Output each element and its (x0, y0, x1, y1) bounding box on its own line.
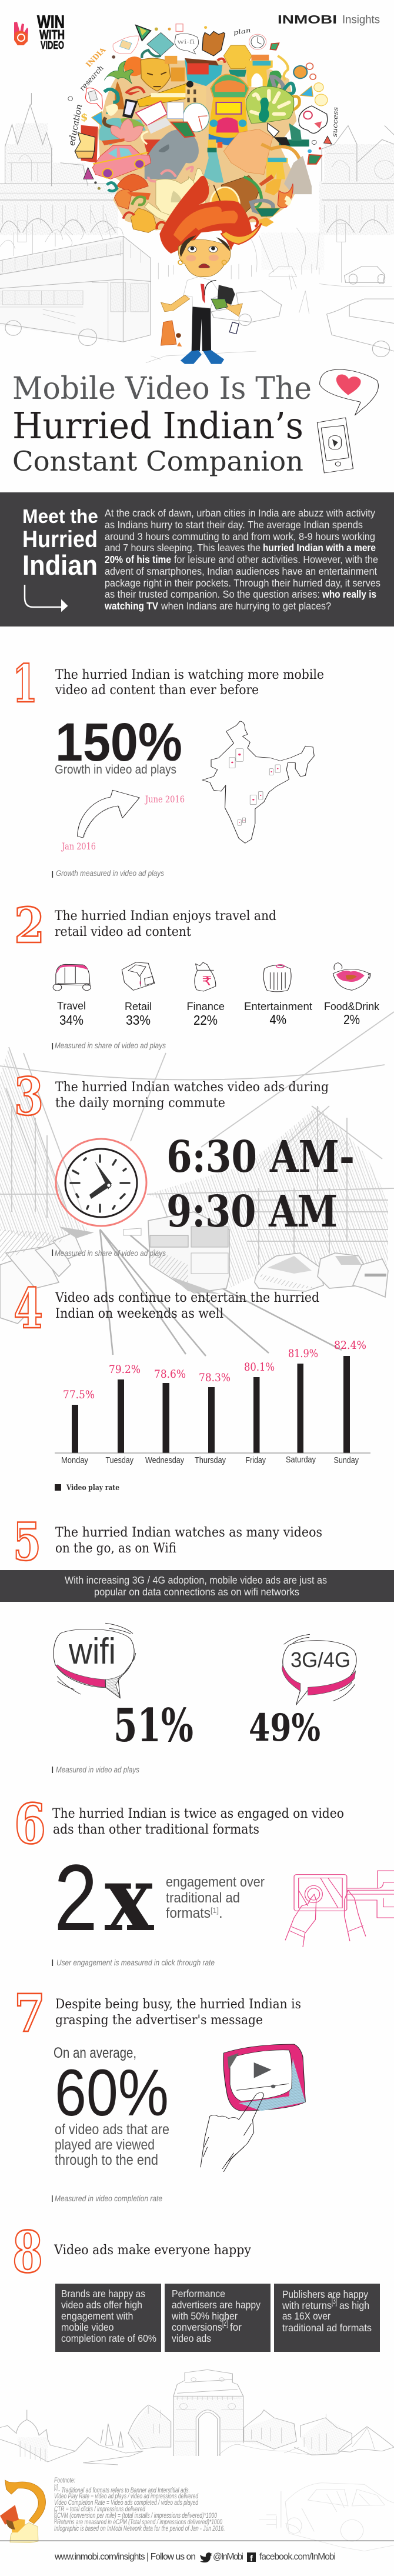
section 7 heading: Despite being busy, the hurried Indian is (55, 1997, 301, 2012)
doodle: village lady (203, 139, 223, 182)
doodle: book left (75, 125, 98, 163)
panel body text: around 3 hours commuting to and from work, 8-9 hours working (105, 531, 375, 542)
footnote text (54, 2477, 225, 2532)
panel body text: hurried Indian with a mere (263, 542, 376, 554)
sketch: double-decker bus (0, 236, 151, 346)
doodle: checkered auto rickshaw, lion capital and horn (223, 124, 312, 195)
day labels: Monday (61, 1455, 88, 1465)
footnote: measured in video ad plays: Measured in video ad plays (56, 1765, 139, 1774)
panel: meet the hurried Indian (0, 492, 394, 626)
panel body text: when Indians are hurrying to get places? (161, 600, 331, 612)
stat: morning commute time: 9:30 AM (166, 1187, 338, 1237)
footnote text: CVM (conversion per mile) = (total installs / impressions delivered)*1000 (57, 2512, 217, 2520)
card: performance advertisers: advertisers are happy (172, 2299, 261, 2311)
card: brands: video ads offer high (61, 2299, 142, 2311)
icon: facebook (247, 2552, 256, 2564)
stat: 60 percent completion: On an average, (54, 2045, 136, 2061)
doodle: outlined icons around cloud: INDIA (84, 45, 108, 69)
card: publishers: Publishers are happy (282, 2288, 368, 2300)
category: Food and Drink: Food&Drink (324, 1001, 380, 1012)
panel body text: who really is (322, 588, 376, 600)
icon: clock (56, 1139, 146, 1226)
stat description: . (219, 1905, 223, 1921)
section 5 heading: The hurried Indian watches as many videos (55, 1525, 322, 1540)
icon: peace hand (14, 22, 28, 45)
banner: 3G 4G adoption (0, 1570, 394, 1602)
stat: 2x engagement (54, 1845, 155, 1952)
section 2 heading (55, 909, 276, 939)
section 3 heading: The hurried Indian watches video ads during (55, 1080, 329, 1095)
panel heading: Hurried (22, 526, 98, 552)
section 3 heading (55, 1080, 329, 1111)
doodle: warm backing tone of cloud (98, 61, 299, 230)
stat description: formats (166, 1905, 211, 1921)
card: performance advertisers: with 50% higher (171, 2310, 238, 2322)
card: publishers (274, 2284, 380, 2352)
doodle: palm tree (104, 56, 145, 109)
section 4 heading (55, 1291, 319, 1321)
left parked cars (0, 1227, 141, 1324)
logo: InMobi Insights: Insights (342, 14, 380, 26)
panel body text: and 7 hours sleeping. This leaves the (105, 542, 261, 554)
section 7 number: 7 (14, 1982, 45, 2044)
map: India with phones (202, 721, 314, 843)
card: publishers: [3] (332, 2295, 337, 2307)
left monuments (0, 2405, 171, 2465)
stat description: traditional ad (166, 1890, 240, 1906)
doodle: folded orange turban (107, 174, 151, 209)
icon: wifi speech bubble (54, 1623, 136, 1698)
day labels: Friday (246, 1455, 266, 1465)
character: the hurried Indian (161, 235, 242, 364)
section 1 heading: The hurried Indian is watching more mobile (55, 668, 324, 682)
India Gate (173, 2370, 243, 2456)
card: brands (55, 2284, 161, 2352)
character: bags, phone and shopping (161, 280, 239, 346)
category: Travel: 34% (59, 1012, 84, 1028)
title: Mobile Video Is The (12, 371, 312, 406)
card: performance advertisers: conversions (172, 2321, 222, 2333)
stat: 60 percent completion: played are viewed (55, 2137, 155, 2153)
doodle: outlined icons around cloud: education (67, 104, 85, 146)
bar values: 82.4% (334, 1339, 366, 1352)
stat: 150% growth: Growth in video ad plays (55, 763, 176, 777)
character: shirt, arms and tie (161, 277, 242, 316)
stat: 2x engagement: 2 (54, 1845, 98, 1950)
tram (148, 1212, 229, 1294)
doodle: fist, lamp and swirls near turban (123, 184, 293, 232)
character: head and face (178, 235, 231, 277)
chart legend (55, 1484, 119, 1492)
footer links: @InMobi (213, 2552, 243, 2562)
logo: InMobi Insights (278, 14, 380, 26)
card: publishers: as high (339, 2300, 369, 2311)
category: Entertainment: 4% (269, 1012, 286, 1027)
bar chart: video play rate by day (55, 1339, 370, 1465)
icon: hands on tablet (285, 1871, 394, 1947)
section 5 heading: on the go, as on Wifi (55, 1541, 176, 1556)
section 6 heading: The hurried Indian is twice as engaged on video (52, 1807, 344, 1821)
bars (72, 1356, 350, 1453)
card: brands: completion rate of 60% (61, 2332, 156, 2344)
footnote text: [2] (54, 2510, 57, 2517)
bar values (63, 1339, 366, 1401)
panel body text: watching TV (104, 600, 158, 612)
category: Finance: ₹ (202, 974, 212, 988)
stat description: engagement over (166, 1874, 265, 1890)
section 1 heading (55, 668, 324, 698)
section 1 heading: video ad content than ever before (55, 683, 259, 698)
day labels: Saturday (286, 1455, 316, 1465)
stat: 60 percent completion: through to the end (55, 2152, 158, 2168)
icon: finger tapping video player (201, 2044, 305, 2172)
section 5 heading (55, 1525, 322, 1556)
sketch: ambassador taxis and pedestrians (146, 263, 394, 363)
title (12, 371, 312, 477)
card: performance advertisers: [2] (222, 2317, 228, 2328)
card: publishers: traditional ad formats (282, 2322, 372, 2334)
footnote: measured in share: Measured in share of video ad plays (55, 1248, 166, 1258)
card: publishers: with returns (282, 2300, 332, 2311)
hero background: pencil sketch of city street (0, 24, 394, 364)
doodle: lantern (218, 45, 252, 76)
doodle: swirls upper right (272, 56, 307, 110)
logo: InMobi Insights: INMOBI (278, 14, 337, 26)
banner: 3G 4G adoption: popular on data connections as on wifi networks (94, 1586, 299, 1598)
panel body text: for leisure and other activities. However, with the (174, 554, 378, 565)
section 2 number: 2 (14, 898, 45, 954)
panel heading (22, 505, 98, 581)
doodle: outlined icons around cloud: $ (81, 112, 88, 124)
category: Finance: Finance (187, 1001, 225, 1012)
card: performance advertisers: video ads (172, 2332, 211, 2344)
section 4 heading: Indian on weekends as well (55, 1307, 223, 1321)
doodle: outlined icons around cloud: wi-fi (177, 38, 195, 45)
panel body text: advent of smartphones, Indian audiences have an entertainment (105, 565, 377, 577)
card: performance advertisers: for (230, 2321, 242, 2333)
card: performance advertisers (165, 2284, 271, 2352)
character: legs and shoes (181, 306, 224, 364)
sketch: right station building (251, 126, 394, 282)
bar values: 78.3% (199, 1371, 231, 1384)
card: brands: engagement with (61, 2310, 133, 2322)
day labels: Thursday (195, 1455, 226, 1465)
panel body text: package right in their pockets. Through their hurried day, it serves (105, 577, 380, 589)
icon: heart speech bubble (320, 369, 378, 415)
footnote: click through rate: User engagement is measured in click through rate (56, 1958, 215, 1967)
arrow: growth arrow (78, 790, 139, 838)
footer rule (0, 2540, 394, 2541)
day labels: Wednesday (145, 1455, 184, 1465)
label: Jan 2016: Jan 2016 (61, 841, 96, 852)
category: Food and Drink (324, 963, 380, 1027)
doodle: auto rickshaw top (165, 56, 222, 88)
panel heading: Meet the (22, 505, 98, 527)
footnote text: [1] (54, 2484, 58, 2491)
footnote text: Infographic is based on InMobi Network data for the period of Jan - Jun 2016. (54, 2525, 225, 2532)
category: Retail: 33% (126, 1012, 151, 1028)
doodle: dhol drum (211, 176, 261, 222)
doodle: speedometer clock and phones (122, 87, 209, 134)
category: Finance (187, 962, 225, 1028)
stat: 51 percent wifi: 51% (113, 1699, 193, 1752)
arrow: white bent arrow (25, 585, 67, 611)
illustration: Delhi skyline sketch (0, 2370, 394, 2465)
footnote text: Video Play Rate = video ad plays / video ad impressions delivered (54, 2493, 198, 2500)
section 2 heading: retail video ad content (55, 925, 191, 939)
category: Finance: 22% (193, 1012, 218, 1028)
footnote: video completion rate: Measured in video completion rate (55, 2194, 162, 2203)
stat: 60 percent completion: 60% (55, 2056, 169, 2130)
illustration: horn blower (0, 2480, 45, 2543)
section 3 number: 3 (14, 1066, 44, 1127)
panel heading: Indian (22, 549, 98, 581)
label: June 2016: June 2016 (144, 794, 185, 805)
doodle: outlined icons around cloud: plan (233, 26, 252, 36)
logo: Win With Video (14, 12, 65, 51)
banner: 3G 4G adoption: With increasing 3G / 4G adoption, mobile video ads are just as (65, 1574, 327, 1586)
title: Constant Companion (12, 445, 303, 477)
day labels: Sunday (334, 1455, 359, 1465)
logo text: VIDEO (41, 39, 64, 51)
footnote text: Footnote: (54, 2477, 75, 2484)
bar values: 80.1% (244, 1361, 275, 1374)
section 1 number: 1 (12, 653, 38, 714)
section 2 heading: The hurried Indian enjoys travel and (55, 909, 276, 924)
footnote: growth measured: Growth measured in video ad plays (56, 868, 164, 878)
logo text: WIN (37, 12, 65, 32)
doodle: peacock (246, 86, 294, 124)
doodle: painted truck (209, 75, 249, 148)
section 7 heading (55, 1997, 301, 2028)
footnote text: Video Completion Rate = Video ads completed / video ads played (54, 2500, 198, 2507)
category: Food and Drink: 2% (343, 1012, 360, 1027)
bar values: 79.2% (109, 1363, 141, 1376)
stat: 60 percent completion (54, 2045, 169, 2168)
logo text (37, 12, 65, 51)
section 8 heading: Video ads make everyone happy (54, 2243, 252, 2258)
right monuments (219, 2410, 394, 2455)
section 6 number: 6 (14, 1792, 46, 1857)
day labels: Tuesday (106, 1455, 133, 1465)
footnote text: CTR = total clicks / impressions delivered (54, 2506, 145, 2513)
doodle: outlined icons around cloud: success (330, 106, 340, 137)
category: Travel (53, 964, 91, 1028)
doodle: outlined icons around cloud (67, 24, 340, 190)
day labels (61, 1455, 359, 1465)
icon: 3G 4G speech bubble: 3G/4G (291, 1648, 350, 1672)
footnote text: Returns are measured in eCPM (Total spend / impressions delivered)*1000 (57, 2519, 222, 2526)
card: brands: Brands are happy as (61, 2288, 145, 2300)
footnote text: - Traditional ad formats refers to Banner and Interstitial ads. (58, 2487, 190, 2494)
card: publishers: as 16X over (282, 2310, 330, 2322)
logo text: WITH (39, 27, 65, 42)
doodle: lotus (111, 119, 143, 142)
icon: 3G 4G speech bubble (282, 1634, 356, 1705)
sketch: left station building (0, 93, 123, 256)
category: Retail: Retail (125, 1001, 152, 1012)
section 4 heading: Video ads continue to entertain the hurried (55, 1291, 319, 1305)
doodle: yellow bus (126, 84, 206, 109)
section 8 number: 8 (12, 2219, 43, 2285)
footnote text: [3] (54, 2517, 57, 2524)
stat: 49 percent 3G 4G: 49% (249, 1706, 320, 1750)
stat description: [1] (211, 1906, 219, 1915)
section 5 number: 5 (13, 1511, 41, 1572)
doodle: elephant (142, 122, 199, 179)
card: performance advertisers: Performance (172, 2288, 225, 2300)
card: brands: mobile video (61, 2321, 114, 2333)
panel body text: as Indians hurry to start their day. The average Indian spends (105, 519, 363, 531)
stat: 60 percent completion: of video ads that are (55, 2121, 169, 2138)
bar values: 77.5% (63, 1388, 95, 1401)
footer links (54, 2552, 336, 2564)
background: commuter street sketch with tram and cars (0, 1012, 394, 1356)
bar values: 78.6% (154, 1368, 186, 1381)
section 7 heading: grasping the advertiser's message (55, 2013, 263, 2028)
footnote: measured in share: Measured in share of video ad plays (55, 1041, 166, 1050)
doodle: lion (141, 58, 171, 91)
stat: 2x engagement: x (105, 1846, 155, 1952)
doodle: teal swirl left (99, 89, 146, 145)
category: Retail (122, 962, 155, 1028)
stat: morning commute time: 6:30 AM- (166, 1132, 355, 1182)
section 6 heading (52, 1807, 344, 1837)
panel body text: At the crack of dawn, urban cities in India are abuzz with activity (105, 507, 375, 519)
doodle: pink car (92, 138, 151, 179)
bar values: 81.9% (288, 1347, 318, 1360)
section 6 heading: ads than other traditional formats (53, 1822, 259, 1837)
footer links: facebook.com/InMobi (259, 2552, 336, 2562)
category: Entertainment (244, 965, 312, 1027)
section 4 number: 4 (14, 1277, 43, 1341)
panel body text: 20% of his time (105, 554, 171, 565)
icon: twitter (200, 2552, 212, 2562)
icon: facebook: f (250, 2554, 253, 2564)
doodle: big turban (157, 176, 261, 254)
category: Entertainment: Entertainment (244, 1001, 312, 1012)
footer links: www.inmobi.com/insights | Follow us on (54, 2552, 196, 2562)
doodle: colourful gate (245, 55, 282, 88)
doodle: outlined icons around cloud: research (78, 64, 105, 92)
stat: morning commute time (166, 1132, 355, 1237)
section 3 heading: the daily morning commute (55, 1096, 225, 1111)
title: Hurried Indian’s (12, 404, 303, 447)
chart legend: Video play rate (66, 1484, 119, 1492)
illustration: faint car sketch (259, 2483, 394, 2551)
panel body text (104, 507, 380, 612)
category: Travel: Travel (57, 1000, 86, 1012)
doodle: Taj Mahal (145, 167, 210, 224)
panel body text: as their trusted companion. So the question arises: (105, 588, 320, 600)
illustration: doodle cloud of Indian icons (67, 24, 340, 254)
icon: wifi speech bubble: wifi (68, 1631, 116, 1672)
right parked cars (255, 1253, 388, 1297)
icon: phone with play button (317, 418, 353, 473)
stat: 150% growth: 150% (55, 712, 182, 772)
stat description (166, 1874, 265, 1921)
